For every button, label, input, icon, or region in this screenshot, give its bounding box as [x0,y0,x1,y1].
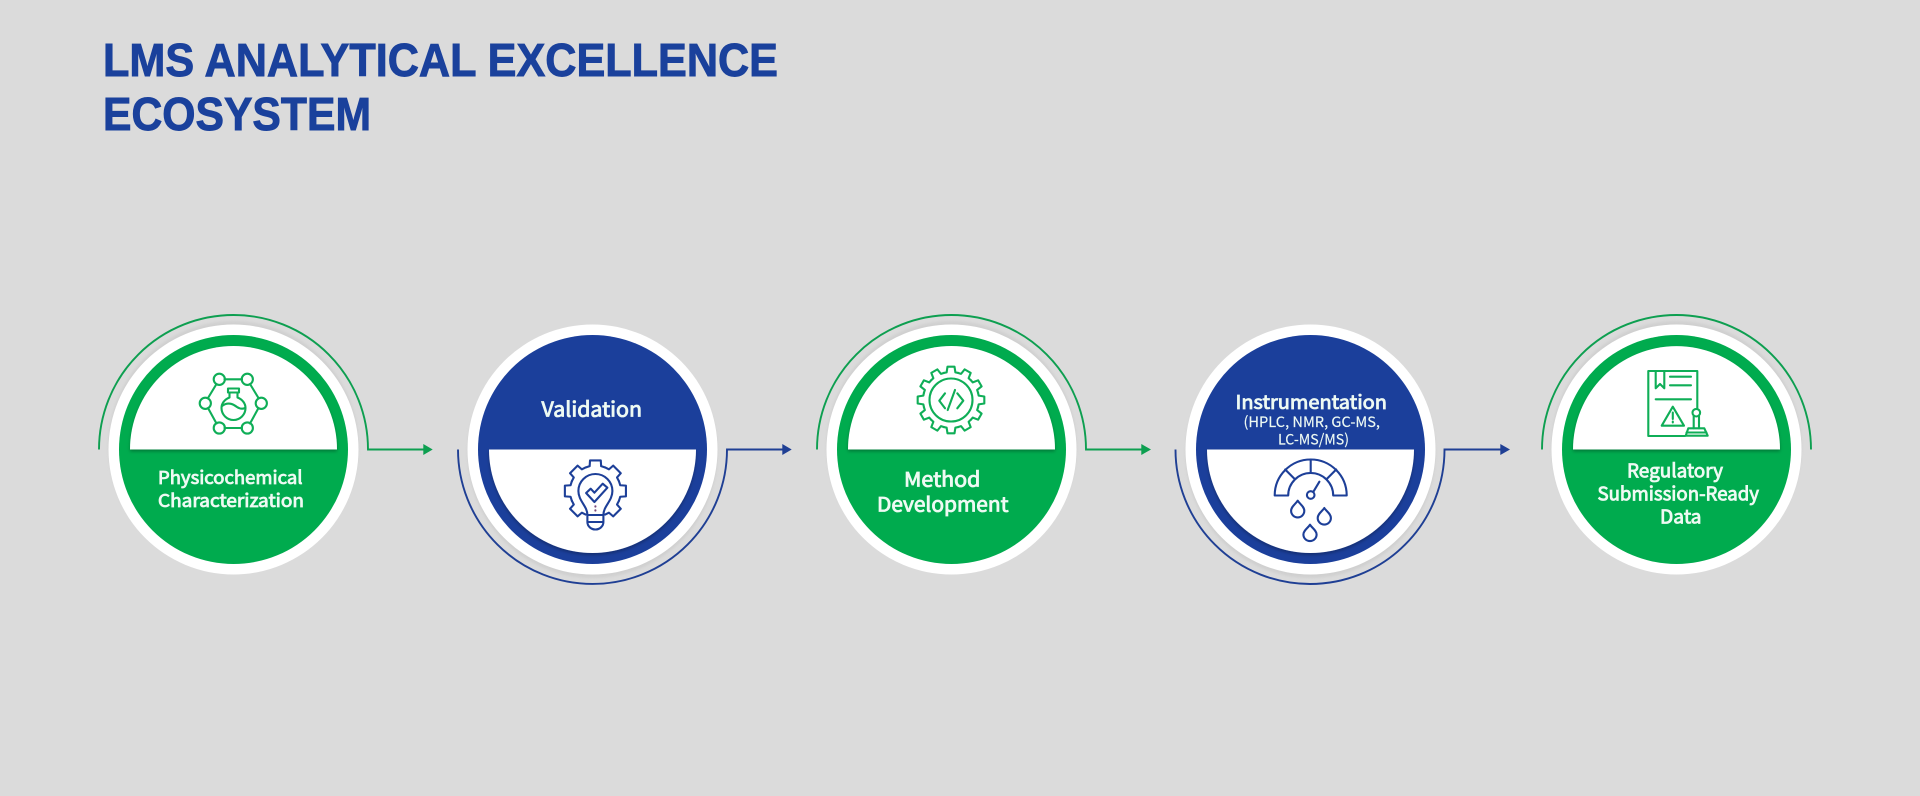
step 4: Instrumentation [1176,324,1510,584]
arc and arrow [458,444,792,584]
step 5: Regulatory Submission-Ready Data [1542,315,1811,574]
arc and arrow [99,315,433,455]
label [1236,388,1387,450]
step 3: Method Development [817,315,1151,574]
circle [1186,324,1436,578]
circle [1552,321,1802,574]
label [1598,456,1759,530]
circle [468,324,718,578]
label: Development [877,488,1009,518]
icon: document with warning and stamp [1648,371,1708,436]
label: Characterization [158,487,304,513]
title: ECOSYSTEM [103,88,371,140]
icon: gauge with droplets [1275,460,1347,541]
label: LC-MS/MS) [1278,429,1349,450]
arc and arrow [817,315,1151,455]
label: Physicochemical [158,464,302,490]
label: Method [904,464,980,492]
label: Regulatory [1627,456,1723,484]
arc and arrow [1176,444,1510,584]
circle [826,321,1076,574]
step 1: Physicochemical Characterization [99,315,433,574]
label: Validation [542,393,642,423]
label [158,464,304,513]
label: Data [1660,502,1702,530]
label: Submission-Ready [1598,480,1759,506]
title [103,34,778,140]
step 2: Validation [458,324,792,584]
label: (HPLC, NMR, GC-MS, [1244,411,1380,432]
title: LMS ANALYTICAL EXCELLENCE [103,34,778,86]
label: Instrumentation [1236,388,1387,415]
circle [108,321,358,574]
icon: gear with light bulb and check [565,460,626,530]
arc [1542,315,1811,450]
label [877,464,1009,518]
icon: flask in hexagon molecule [200,374,267,434]
icon: gear with code brackets [918,367,984,433]
